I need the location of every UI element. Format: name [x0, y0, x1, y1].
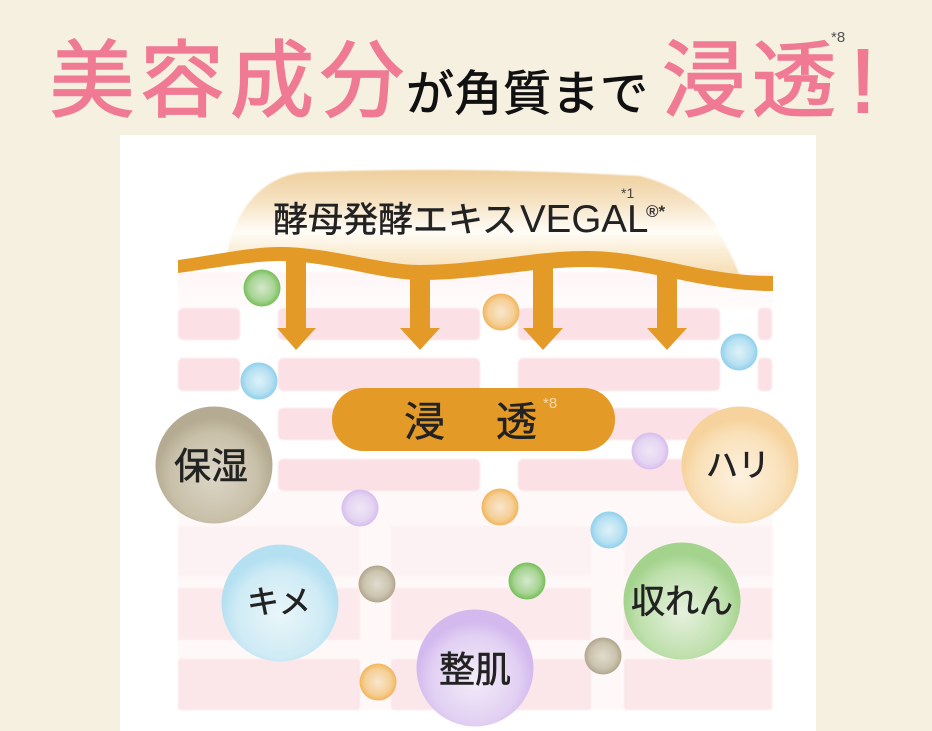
title: 浸透: 浸透 [662, 14, 842, 135]
label: 酵母発酵エキスVEGAL: 酵母発酵エキス [273, 192, 517, 243]
title [50, 14, 876, 135]
skin cell layers [178, 272, 773, 710]
sphere: キメ [222, 544, 338, 662]
label: 酵母発酵エキスVEGAL: ®* [646, 202, 666, 221]
title: exclamation mark: ! [850, 32, 876, 132]
penetration pill: *8 [543, 395, 557, 412]
sphere: キメ: キメ [247, 577, 311, 623]
label: 酵母発酵エキスVEGAL [273, 185, 666, 243]
penetration pill: 透 [496, 388, 537, 448]
skin surface wave [178, 247, 773, 291]
sphere: 整肌 [416, 610, 534, 726]
penetration arrows [277, 255, 687, 350]
sphere: ハリ [682, 406, 798, 524]
sphere: ハリ: ハリ [706, 440, 770, 486]
essence droplet mound [226, 170, 741, 280]
label: 酵母発酵エキスVEGAL: *1 [621, 185, 634, 201]
penetration pill: 浸 [404, 388, 445, 448]
panel: skin diagram [120, 135, 816, 731]
sphere: 収れん: 収れん [631, 574, 733, 623]
title: が角質まで: が角質まで [406, 54, 649, 124]
sphere: 収れん [624, 542, 740, 660]
label: 酵母発酵エキスVEGAL: VEGAL [520, 198, 648, 241]
sphere: 保湿: 保湿 [174, 436, 248, 490]
sphere: 保湿 [156, 406, 272, 524]
sphere: 整肌: 整肌 [439, 641, 511, 693]
footnote mark *8: *8 [831, 29, 845, 46]
panel background [120, 135, 816, 731]
title: 美容成分: 美容成分 [50, 14, 410, 135]
penetration pill [332, 388, 615, 451]
small ingredient spheres [240, 270, 758, 700]
